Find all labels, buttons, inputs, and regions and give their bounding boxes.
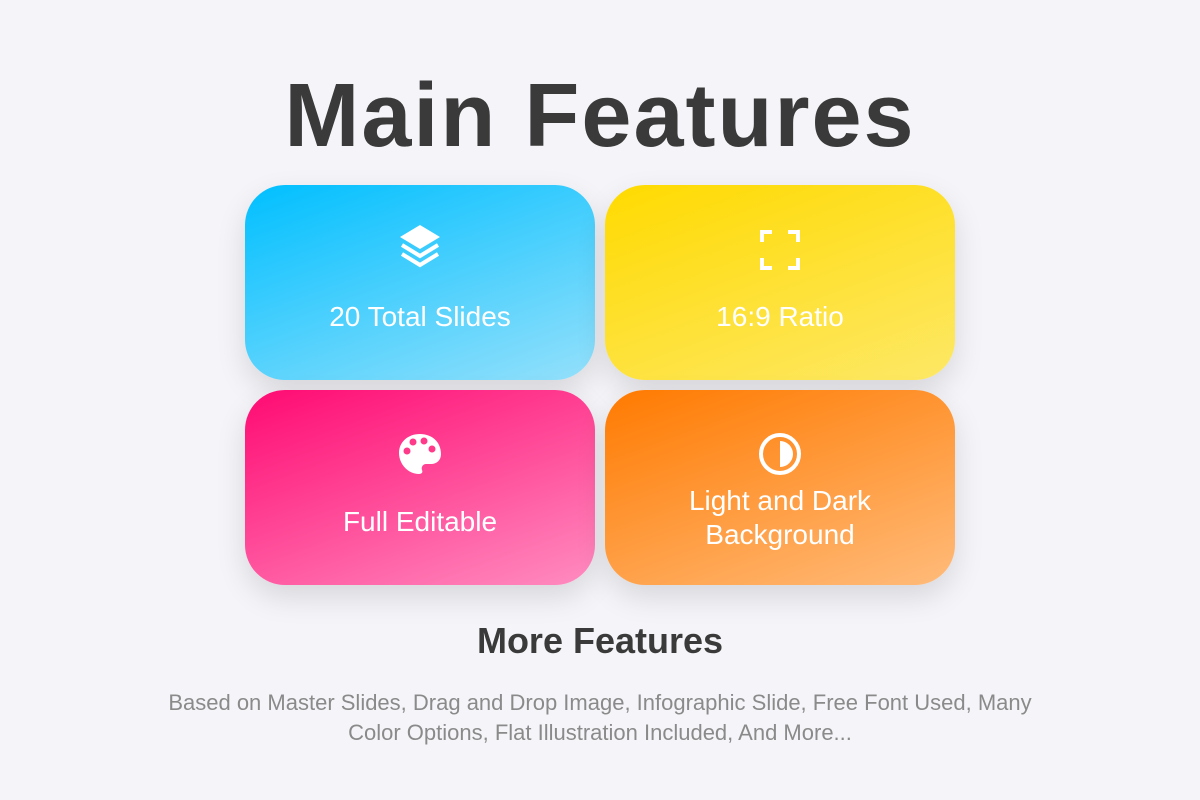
label: Background (705, 519, 855, 550)
card: editable (245, 390, 595, 585)
icon: palette (399, 434, 441, 474)
text block (168, 690, 1032, 745)
label: Light and Dark (689, 485, 871, 516)
label: 20 Total Slides (329, 301, 511, 332)
card: total slides (245, 185, 595, 380)
icon: frame (760, 230, 800, 270)
card: ratio (605, 185, 955, 380)
text block: Color Options, Flat Illustration Included, And More... (348, 720, 852, 745)
label (689, 485, 871, 550)
text block: Based on Master Slides, Drag and Drop Image, Infographic Slide, Free Font Used, Many (168, 690, 1032, 715)
heading: more features: More Features (477, 620, 723, 661)
title: Main Features (284, 66, 916, 166)
icon: contrast (759, 433, 801, 475)
label: 16:9 Ratio (716, 301, 844, 332)
icon: layers (400, 225, 440, 268)
card: light and dark (605, 390, 955, 585)
label: Full Editable (343, 506, 497, 537)
